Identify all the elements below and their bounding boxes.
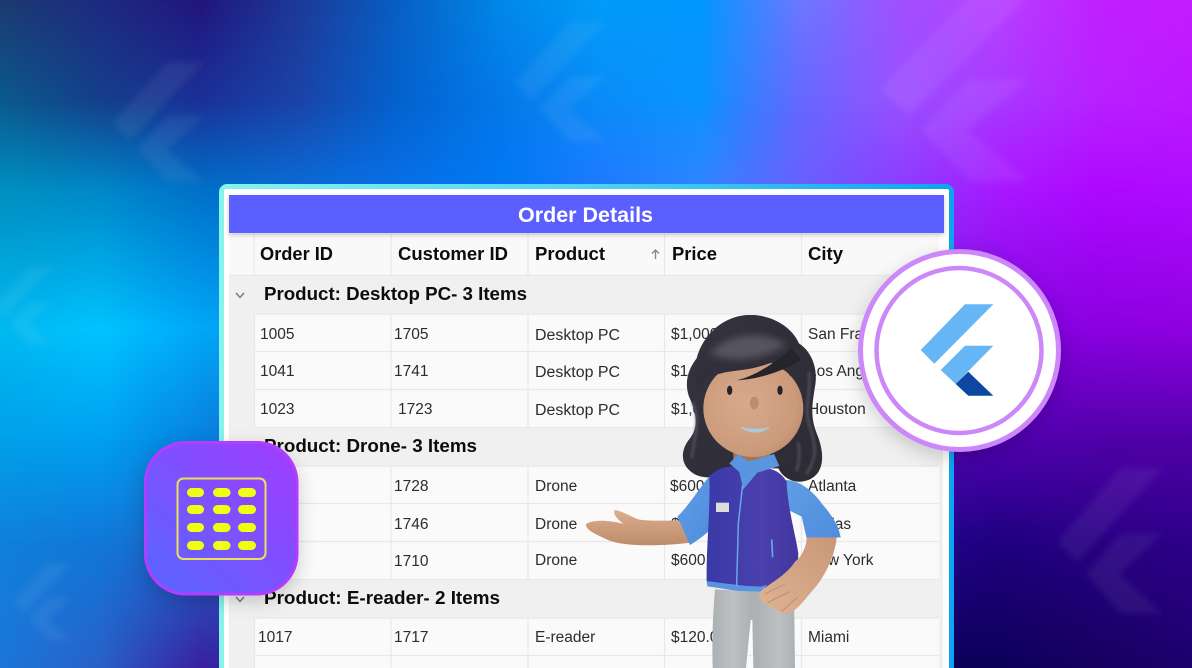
group: desktop pc: 1005 bbox=[260, 326, 294, 343]
name badge bbox=[716, 503, 729, 512]
table white inner area bbox=[224, 189, 949, 668]
fringe sheen bbox=[710, 335, 787, 359]
icon: flutter logo badge bbox=[860, 252, 1058, 450]
side lock bbox=[737, 348, 802, 380]
column header row: City bbox=[808, 244, 843, 264]
group: e-reader: $120.00 bbox=[671, 629, 727, 646]
vest body bbox=[707, 467, 798, 588]
right eye bbox=[777, 386, 783, 395]
table frame bbox=[219, 184, 954, 668]
pocket bbox=[772, 539, 773, 557]
group: drone: Dallas bbox=[808, 516, 851, 533]
group: drone: 1728 bbox=[394, 478, 428, 495]
torso: shirt and vest bbox=[677, 443, 841, 614]
mouth bbox=[740, 427, 770, 433]
group: drone bbox=[229, 428, 943, 580]
group: e-reader: 1017 bbox=[258, 629, 292, 646]
column header row bbox=[229, 234, 939, 276]
group: drone: $600.00 bbox=[671, 552, 727, 569]
icon: data grid tile bbox=[146, 442, 297, 594]
group: desktop pc: 1723 bbox=[398, 401, 432, 418]
fringe bbox=[695, 315, 799, 390]
vest hem bbox=[707, 581, 767, 592]
group: desktop pc: $1,000.00 bbox=[671, 401, 740, 418]
group: desktop pc: Los Angeles bbox=[808, 363, 893, 380]
group: drone: New York bbox=[808, 552, 874, 569]
group: drone: 1010 bbox=[260, 553, 295, 570]
finger lines bbox=[765, 584, 797, 611]
group: desktop pc: Desktop PC bbox=[535, 402, 620, 419]
group: e-reader: E-reader bbox=[535, 629, 595, 646]
group: drone: Drone bbox=[535, 516, 577, 533]
group: drone: 1046 bbox=[260, 516, 294, 533]
group: desktop pc: 1741 bbox=[394, 363, 428, 380]
panel: order details table bbox=[219, 184, 954, 668]
group: desktop pc: 1705 bbox=[394, 326, 428, 343]
group: drone: Drone bbox=[535, 478, 577, 495]
neck bbox=[733, 443, 770, 465]
group: e-reader bbox=[229, 580, 943, 668]
column header row: Price bbox=[672, 244, 717, 264]
group: e-reader: Product: E-reader- 2 Items bbox=[264, 588, 500, 608]
group: desktop pc: San Francisco bbox=[808, 326, 907, 343]
group: desktop pc: $1,000.00 bbox=[671, 363, 740, 380]
group: e-reader: 1717 bbox=[394, 629, 428, 646]
group: e-reader: Miami bbox=[808, 629, 849, 646]
group: drone: 1746 bbox=[394, 516, 428, 533]
title bar: Order Details bbox=[518, 204, 653, 227]
group: desktop pc: 1023 bbox=[260, 401, 294, 418]
hair back bbox=[683, 315, 822, 482]
title bar bbox=[229, 195, 944, 233]
arm left with open hand bbox=[586, 510, 692, 545]
group: drone: $600.00 bbox=[670, 478, 726, 495]
column header row: Customer ID bbox=[398, 244, 508, 264]
group: drone: Drone bbox=[535, 552, 577, 569]
zipper bbox=[737, 485, 743, 585]
group: drone: $600.00 bbox=[671, 516, 727, 533]
nose bbox=[750, 397, 759, 409]
group: drone: Product: Drone- 3 Items bbox=[264, 436, 477, 456]
sleeve left bbox=[677, 475, 712, 545]
group: desktop pc: Desktop PC bbox=[535, 364, 620, 381]
group: desktop pc bbox=[229, 276, 943, 428]
character: 3d presenter woman bbox=[586, 315, 841, 668]
group: desktop pc: 1041 bbox=[260, 363, 294, 380]
group: desktop pc: Desktop PC bbox=[535, 327, 620, 344]
group: drone: Atlanta bbox=[808, 478, 857, 495]
left eye bbox=[727, 386, 732, 395]
column header row: Order ID bbox=[260, 244, 333, 264]
group: drone: 1710 bbox=[394, 553, 429, 570]
sleeve right bbox=[785, 480, 841, 538]
face bbox=[703, 360, 803, 457]
group: drone: 1028 bbox=[260, 478, 294, 495]
arm right with hand on hip bbox=[760, 537, 837, 614]
head bbox=[695, 315, 803, 457]
group: desktop pc: Product: Desktop PC- 3 Items bbox=[264, 284, 527, 304]
group: desktop pc: $1,000.00 bbox=[671, 326, 740, 343]
collar and shirt front bbox=[729, 454, 779, 489]
group: desktop pc: Houston bbox=[808, 401, 866, 418]
pants bbox=[712, 589, 795, 668]
column header row: Product bbox=[535, 244, 605, 264]
right eyebrow bbox=[783, 369, 791, 376]
